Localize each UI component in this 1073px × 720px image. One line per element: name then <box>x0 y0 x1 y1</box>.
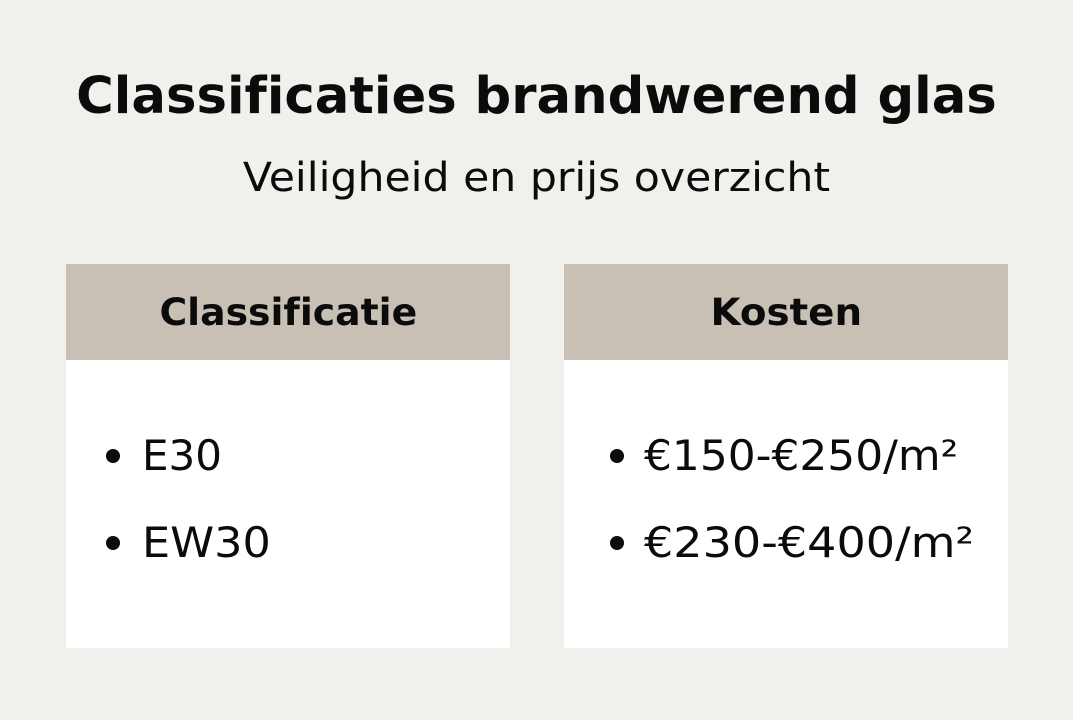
bullet: EW30 <box>106 536 120 550</box>
panel body: classificatie list <box>66 360 510 648</box>
title: Classificaties brandwerend glas <box>76 67 997 126</box>
heading: classificatie: Classificatie <box>159 291 417 334</box>
heading: kosten <box>564 264 1008 360</box>
panel: kosten <box>564 264 1008 648</box>
subtitle: Veiligheid en prijs overzicht <box>243 155 830 201</box>
text: price E30: €150-€250/m² <box>644 431 958 480</box>
bullet: price E30 <box>610 449 624 463</box>
panel: classificatie <box>66 264 510 648</box>
heading: classificatie <box>66 264 510 360</box>
heading: kosten: Kosten <box>710 291 862 334</box>
panel body: kosten list <box>564 360 1008 648</box>
bullet: price EW30 <box>610 536 624 550</box>
bullet: E30 <box>106 449 120 463</box>
text: EW30: EW30 <box>142 518 271 567</box>
text: E30: E30 <box>142 431 222 480</box>
text: price EW30: €230-€400/m² <box>644 518 974 567</box>
